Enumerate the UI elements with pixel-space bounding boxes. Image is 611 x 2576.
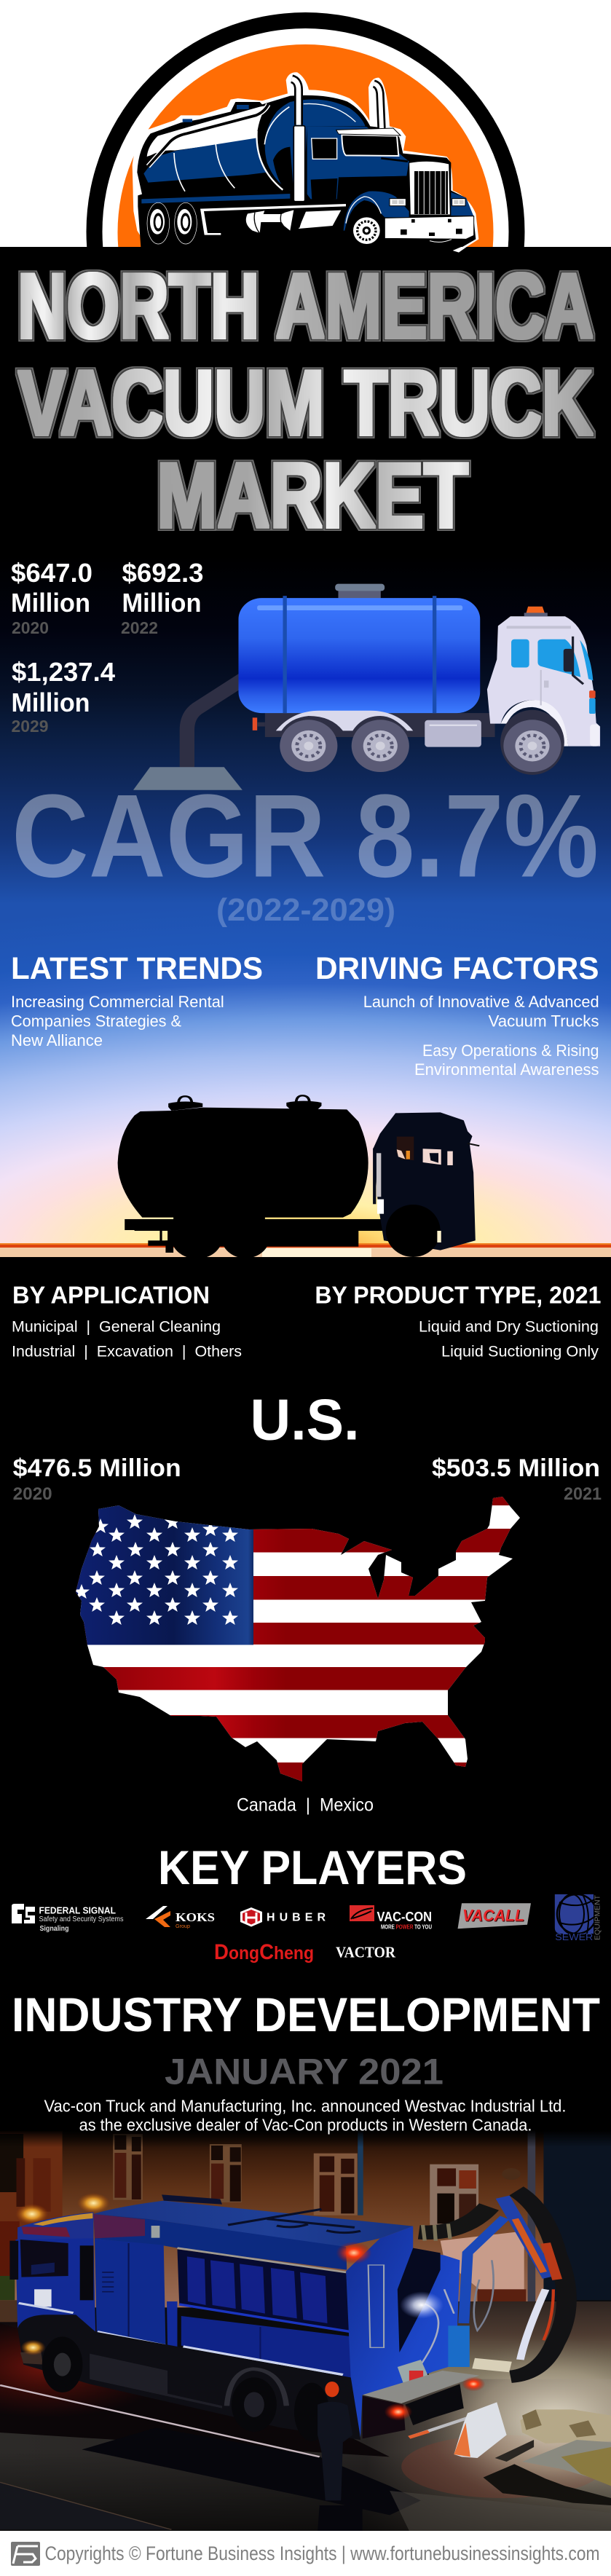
stat: 2020 market value: $647.0: [11, 558, 92, 588]
logo: Vacall: VACALL: [462, 1907, 524, 1924]
panel: latest trends: LATEST TRENDS: [11, 951, 263, 986]
logo: Vacall: [457, 1903, 531, 1929]
logo: Federal Signal: FEDERAL SIGNAL: [39, 1905, 116, 1916]
description: Vac-con Truck and Manufacturing, Inc. announced Westvac Industrial Ltd.: [44, 2096, 567, 2115]
stat: U.S. 2020: [13, 1454, 181, 1504]
illustration: blue vacuum truck: [133, 584, 600, 790]
panel: by product type: Liquid and Dry Suctioning: [419, 1319, 599, 1336]
panel: by product type: Liquid Suctioning Only: [441, 1344, 599, 1360]
footer: [0, 2531, 611, 2576]
panel: latest trends: New Alliance: [11, 1031, 103, 1049]
panel: latest trends: [11, 951, 263, 1049]
date: JANUARY 2021: [165, 2052, 444, 2092]
logo: Vac-Con: VAC-CON: [377, 1910, 432, 1924]
panel: driving factors: Vacuum Trucks: [488, 1012, 599, 1030]
icon: tanker truck: [133, 72, 478, 253]
barrier and rubble: [454, 2402, 611, 2505]
panel: by application: Industrial | Excavation | Others: [12, 1344, 242, 1360]
logos: key players: [12, 1894, 602, 1964]
text: January 2021 development: [12, 1988, 600, 2134]
logo: Sewer Equipment: SEWER: [555, 1932, 593, 1942]
panel: driving factors: Environmental Awareness: [414, 1060, 599, 1079]
panel: by product type: [315, 1281, 601, 1360]
suction arm and hose: [419, 2191, 567, 2376]
panel: by application: [12, 1281, 242, 1360]
panel: by application: BY APPLICATION: [12, 1281, 210, 1308]
stat: 2020 market value: [11, 558, 92, 637]
stat: 2029 market value: 2029: [12, 717, 48, 736]
logo: KOKS: Group: [176, 1924, 190, 1929]
stat: 2020 market value: Million: [11, 588, 90, 618]
stat: U.S. 2021: 2021: [564, 1484, 602, 1504]
logo badge: circle with truck: [86, 12, 524, 253]
panel: driving factors: [315, 951, 599, 1079]
worker: [318, 2382, 352, 2500]
panel: by product type: BY PRODUCT TYPE, 2021: [315, 1281, 601, 1308]
logo: Vac-Con: [350, 1905, 432, 1931]
description: as the exclusive dealer of Vac-Con products in Western Canada.: [79, 2115, 532, 2134]
CAGR figure: (2022-2029): [216, 892, 395, 928]
logo: KOKS: [146, 1906, 215, 1929]
ground: pavement, road and shadow: [0, 2301, 611, 2531]
logo: Sewer Equipment: [555, 1894, 602, 1942]
description: [44, 2096, 567, 2134]
logo: Dong Cheng: DongCheng: [214, 1940, 314, 1964]
panel: by application: Municipal | General Cleaning: [12, 1319, 221, 1336]
text: other countries: Canada | Mexico: [237, 1795, 374, 1816]
silhouette truck at sunset: [118, 1095, 479, 1259]
photo: vacuum truck at night: [0, 2130, 611, 2531]
logo: Huber: [240, 1907, 326, 1927]
stat: 2022 market value: [121, 558, 204, 637]
panel: driving factors: Launch of Innovative & Advanced: [363, 993, 599, 1011]
building facade: [0, 2130, 611, 2322]
panel: latest trends: Companies Strategies &: [11, 1012, 181, 1030]
logo: Vacall: VACALL: [463, 1907, 525, 1926]
stat: 2029 market value: [12, 657, 115, 736]
stat: 2022 market value: 2022: [121, 618, 158, 637]
stat: 2029 market value: Million: [12, 688, 90, 717]
panel: driving factors: DRIVING FACTORS: [315, 951, 599, 986]
logo: Sewer Equipment: EQUIPMENT: [594, 1895, 602, 1940]
logo: Federal Signal: [12, 1904, 124, 1933]
heading: U.S.: U.S.: [251, 1387, 360, 1452]
title: MARKET: [157, 444, 468, 547]
logo: Vactor: VACTOR: [336, 1943, 396, 1961]
heading: key players: KEY PLAYERS: [158, 1840, 467, 1894]
logo: Vac-Con: MORE POWER TO YOU: [381, 1924, 432, 1931]
stat: U.S. 2020: 2020: [13, 1484, 52, 1504]
stat: U.S. 2021: [432, 1454, 602, 1504]
title: [17, 254, 594, 547]
logo: KOKS: KOKS: [176, 1910, 215, 1924]
stat: 2022 market value: Million: [122, 588, 201, 618]
stat: U.S. 2021: $503.5 Million: [432, 1454, 600, 1482]
map: U.S. flag: [73, 1493, 524, 1784]
panel: driving factors: Easy Operations & Rising: [422, 1041, 599, 1060]
icon: Fortune Business Insights logo: [11, 2542, 40, 2566]
stat: U.S. 2020: $476.5 Million: [13, 1454, 181, 1482]
panel: latest trends: Increasing Commercial Rental: [11, 993, 224, 1011]
logo: Federal Signal: Signaling: [39, 1925, 68, 1933]
vehicle body: [9, 2194, 485, 2441]
stat: 2020 market value: 2020: [12, 618, 49, 637]
logo: Huber: HUBER: [267, 1911, 326, 1924]
logo: Federal Signal: Safety and Security Systems: [39, 1915, 124, 1923]
stat: 2029 market value: $1,237.4: [12, 657, 115, 687]
stat: 2022 market value: $692.3: [122, 558, 204, 588]
